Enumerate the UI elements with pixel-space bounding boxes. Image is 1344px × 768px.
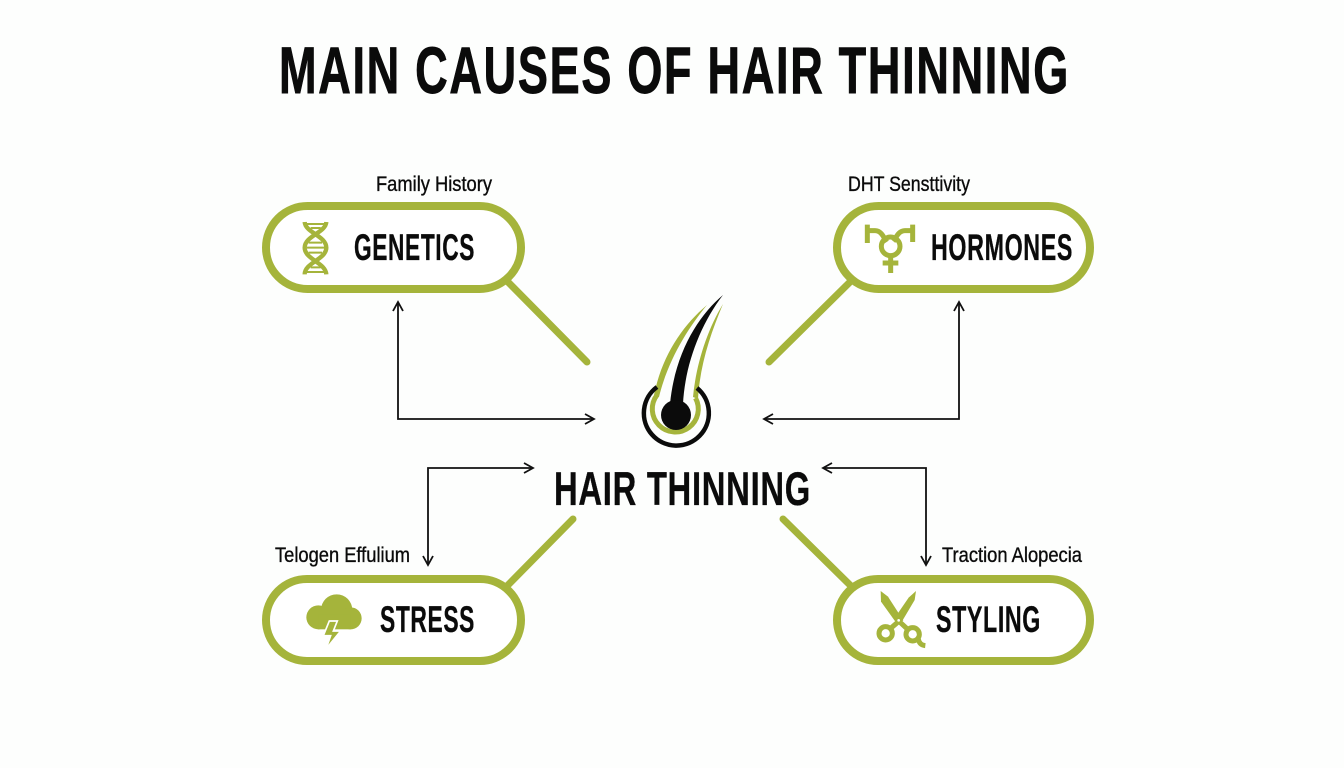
arrow: stress loop xyxy=(423,463,533,565)
panel: styling xyxy=(783,519,1090,661)
pill outline: stress xyxy=(266,579,521,661)
pill outline: hormones xyxy=(837,206,1090,289)
caption: DHT sensitivity: DHT Sensttivity xyxy=(848,173,970,196)
label: genetics: GENETICS xyxy=(354,227,475,268)
connector: genetics to centre xyxy=(508,282,587,362)
connector: hormones to centre xyxy=(769,282,850,362)
connector: styling to centre xyxy=(783,519,850,585)
icon: storm cloud xyxy=(306,594,362,649)
icon: hair follicle xyxy=(644,295,723,446)
icon: scissors xyxy=(879,591,925,646)
arrow: genetics loop xyxy=(393,302,594,424)
label: stress: STRESS xyxy=(380,599,475,640)
centre heading: hair thinning: HAIR THINNING xyxy=(554,462,811,515)
icon: DNA helix xyxy=(305,222,326,274)
arrow: styling loop xyxy=(823,463,931,565)
panel: stress xyxy=(266,519,573,661)
label: styling: STYLING xyxy=(936,599,1041,640)
label: hormones: HORMONES xyxy=(931,227,1073,268)
icon: hormone symbol xyxy=(867,225,913,273)
pill outline: styling xyxy=(837,579,1090,661)
panel: hormones xyxy=(769,173,1090,362)
connector: stress to centre xyxy=(508,519,573,585)
panel: genetics xyxy=(266,173,587,362)
pill outline: genetics xyxy=(266,206,521,289)
arrow: hormones loop xyxy=(764,302,964,424)
caption: traction alopecia: Traction Alopecia xyxy=(942,544,1082,567)
caption: family history: Family History xyxy=(376,173,492,196)
caption: telogen effluvium: Telogen Effulium xyxy=(275,544,410,567)
